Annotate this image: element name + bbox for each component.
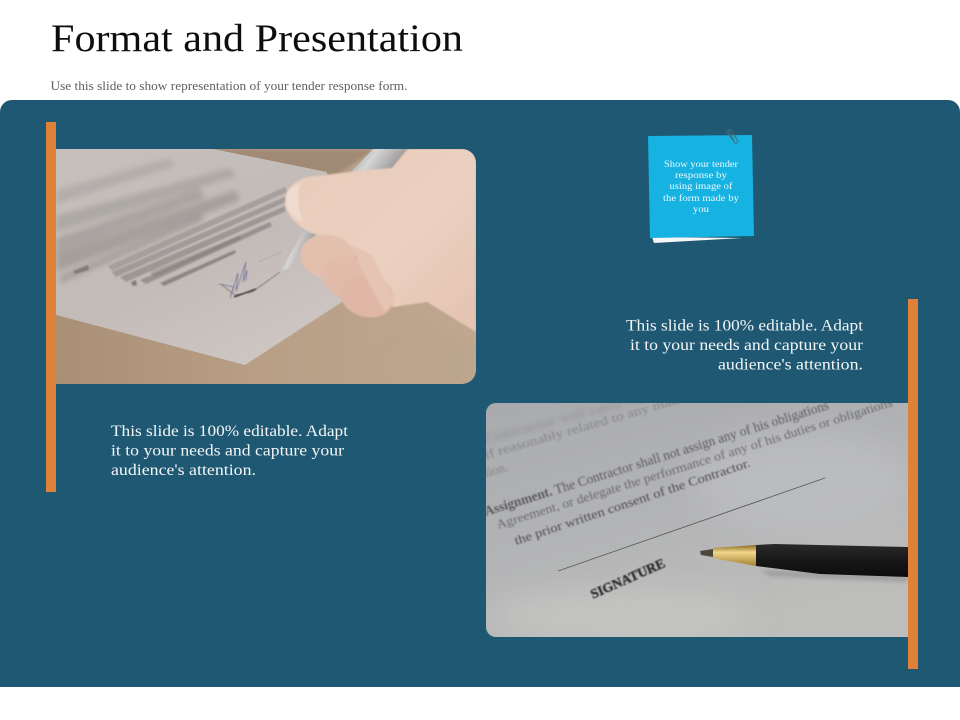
hand: [285, 149, 476, 332]
text: left caption: [111, 423, 349, 479]
contract text: tion.: [483, 459, 509, 480]
photo: hand signing a document: [56, 149, 476, 384]
sticky note text: [663, 160, 739, 215]
icon: paperclip: [726, 130, 738, 143]
contract text: if reasonably related to any matters under: [483, 376, 738, 462]
text: left caption: This slide is 100% editable. Adapt: [111, 423, 349, 440]
contract text: the prior written consent of the Contractor.: [512, 455, 752, 548]
signature label: SIGNATURE: [588, 555, 667, 602]
text: left caption: audience's attention.: [111, 462, 256, 479]
accent bar: left: [46, 122, 56, 492]
sticky note text: response by: [675, 171, 727, 181]
sticky note: [648, 130, 754, 243]
text: right caption: This slide is 100% editable. Adapt: [626, 318, 864, 334]
signature scribble: [219, 252, 282, 298]
subtitle: Use this slide to show representation of your tender response form.: [50, 78, 407, 93]
pen: [760, 570, 908, 582]
contract text: Contractor will carry out the services with care: [483, 349, 796, 446]
sticky note text: using image of: [670, 181, 733, 192]
contract text: Assignment. The Contractor shall not assign any of his obligations: [482, 397, 831, 519]
text: right caption: it to your needs and capture your: [630, 337, 864, 354]
sticky note text: Show your tender: [664, 160, 739, 170]
title: Format and Presentation: [51, 17, 463, 60]
text: right caption: [626, 318, 864, 374]
sticky note text: the form made by: [663, 193, 739, 204]
text: left caption: it to your needs and capture your: [111, 442, 345, 460]
text: right caption: audience's attention.: [718, 356, 863, 374]
signature line: [558, 478, 825, 571]
contract text: Agreement, or delegate the performance of any of his duties or obligations: [494, 394, 894, 532]
accent bar: right: [908, 299, 918, 669]
photo: contract with pen on signature line: [486, 403, 908, 637]
sticky note text: you: [693, 205, 709, 215]
pen: [280, 232, 316, 272]
